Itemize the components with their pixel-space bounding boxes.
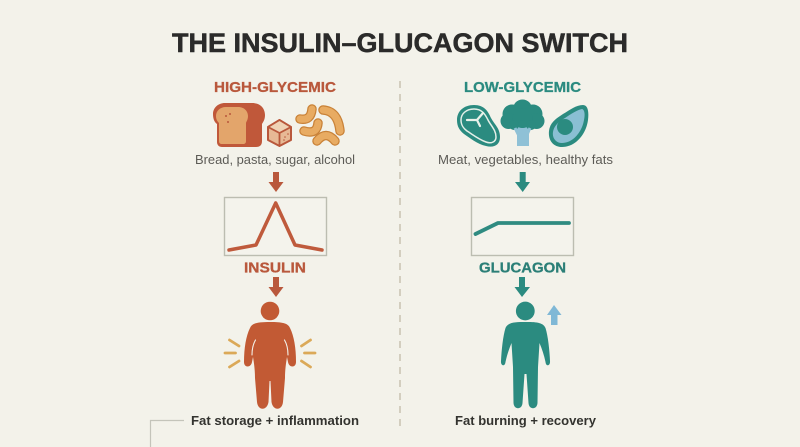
arrow: foods to glucagon chart xyxy=(515,172,530,192)
text: high-glycemic foods: Bread, pasta, sugar, alcohol xyxy=(195,152,355,167)
label: glucagon: GLUCAGON xyxy=(479,260,566,276)
heading: low-glycemic: LOW-GLYCEMIC xyxy=(464,79,581,96)
panel: high-glycemic xyxy=(191,79,359,428)
icon: sugar cube xyxy=(268,120,291,146)
arrow: foods to insulin chart xyxy=(268,172,284,192)
title: THE INSULIN–GLUCAGON SWITCH xyxy=(172,28,628,58)
icon: lean figure xyxy=(501,302,550,408)
icon: avocado xyxy=(549,105,588,147)
icon: pasta xyxy=(300,109,340,141)
icon: overweight figure xyxy=(244,302,296,409)
chart: glucagon steady line xyxy=(472,198,574,256)
arrow: insulin to body xyxy=(268,277,284,297)
arrow: energy up xyxy=(547,305,562,325)
panel: low-glycemic xyxy=(438,79,614,428)
icon: broccoli xyxy=(500,100,544,146)
text: low-glycemic foods: Meat, vegetables, healthy fats xyxy=(438,152,614,167)
chart: insulin spike xyxy=(224,198,326,256)
icon: meat xyxy=(457,105,500,147)
heading: high-glycemic: HIGH-GLYCEMIC xyxy=(214,79,336,96)
text: left outcome: Fat storage + inflammation xyxy=(191,413,359,428)
text: right outcome: Fat burning + recovery xyxy=(455,413,597,428)
arrow: glucagon to body xyxy=(514,277,530,297)
icon: bread xyxy=(213,103,265,147)
icon: inflammation rays xyxy=(225,340,315,367)
connector line xyxy=(150,420,184,447)
label: insulin: INSULIN xyxy=(244,260,306,276)
